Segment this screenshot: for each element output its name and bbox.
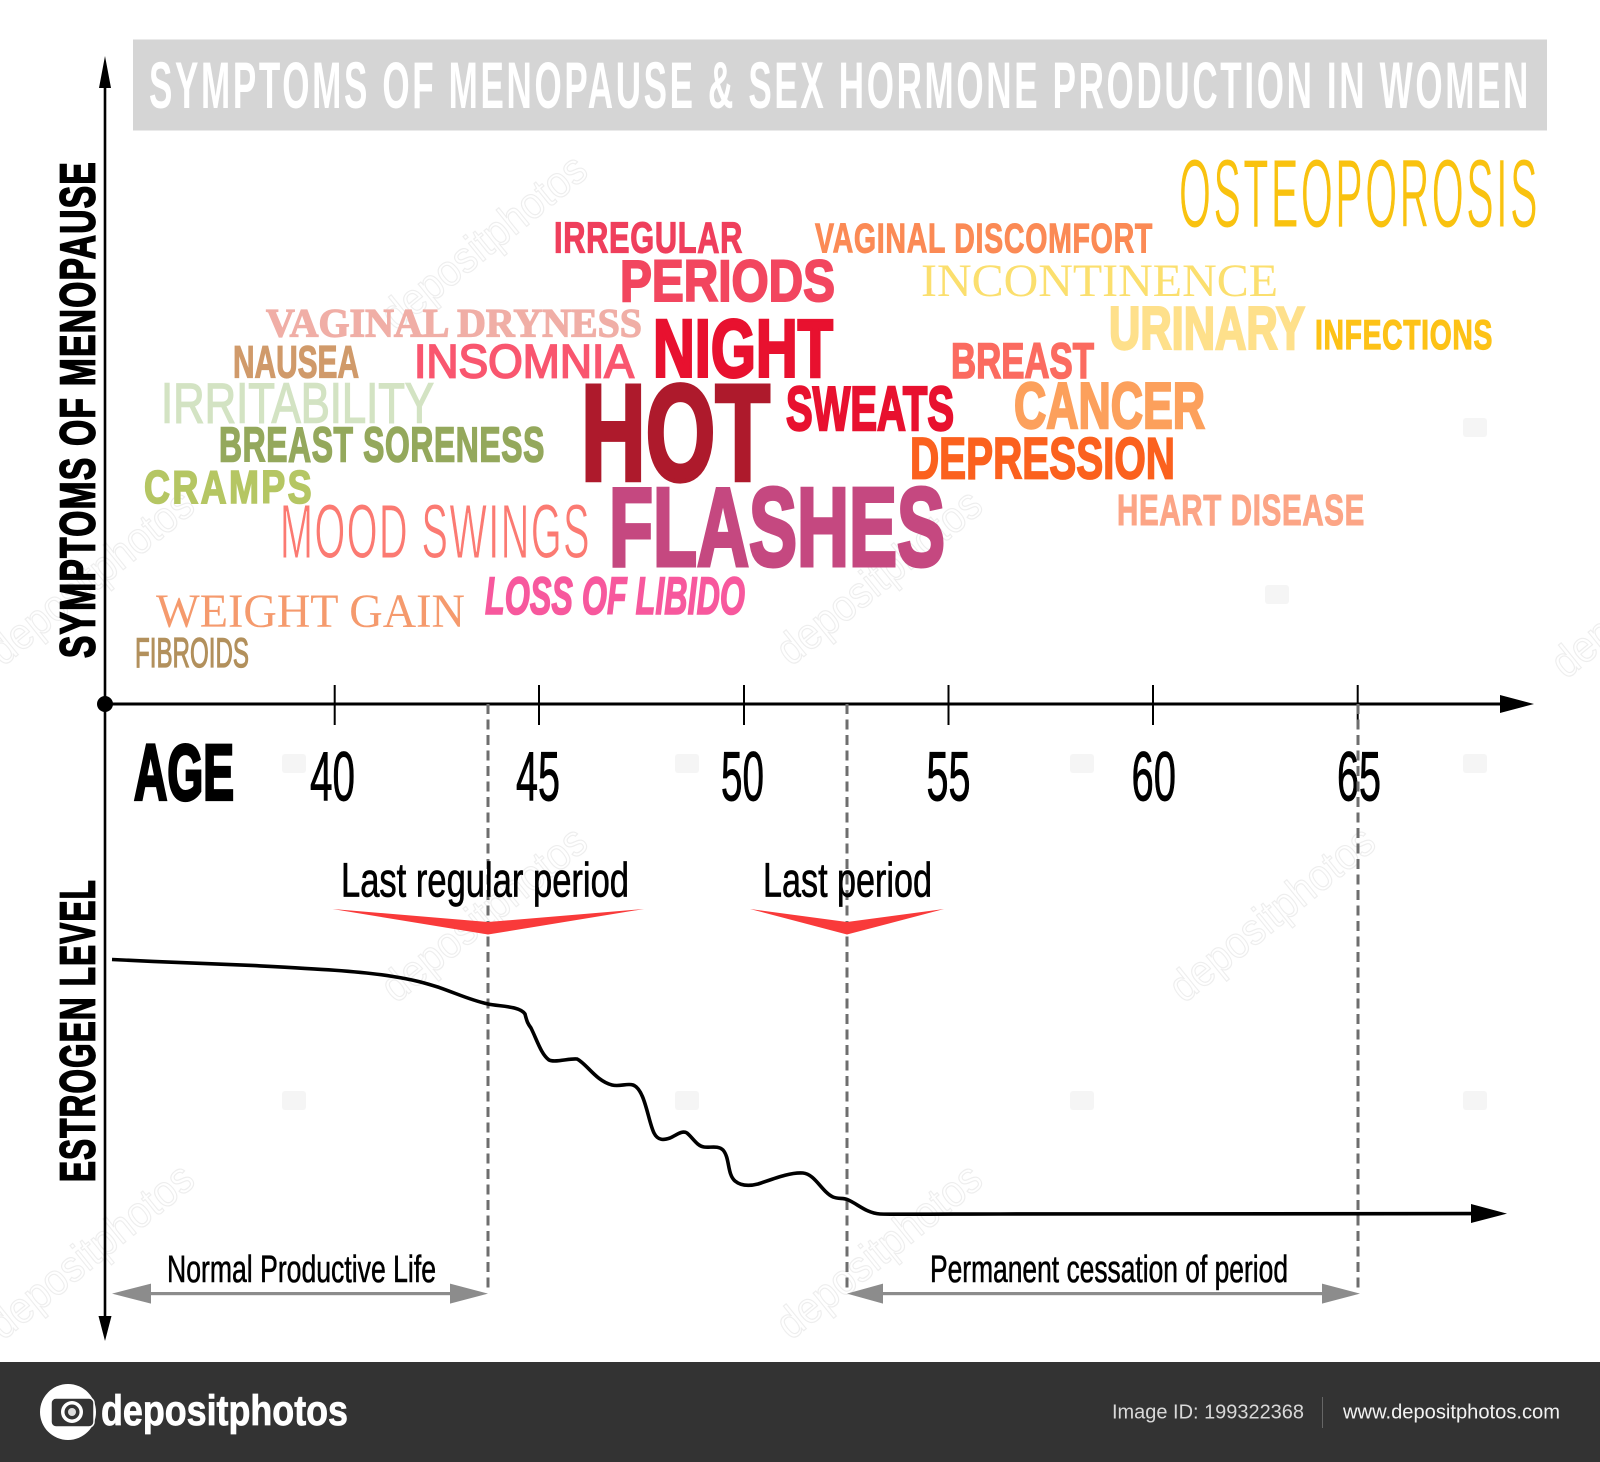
word: infections: INFECTIONS (1315, 311, 1493, 358)
watermark pattern: depositphotos (371, 816, 597, 1012)
callout: last period (750, 854, 944, 934)
brand name: depositphotos (101, 1387, 348, 1435)
age tick labels: 45 (516, 738, 560, 816)
watermark pattern: depositphotos (766, 479, 992, 675)
y axis with arrowheads (98, 56, 112, 1341)
footer bar (0, 1362, 1600, 1462)
y axis label: estrogen: ESTROGEN LEVEL (52, 879, 106, 1182)
word cloud of symptoms (135, 139, 1540, 676)
word: incontinence: INCONTINENCE (921, 255, 1278, 307)
age tick labels (310, 738, 1381, 816)
watermark pattern: depositphotos (766, 1153, 992, 1349)
watermark pattern: depositphotos (371, 144, 597, 340)
image id: Image ID: 199322368 (1112, 1400, 1304, 1424)
word: cancer: CANCER (1014, 369, 1205, 442)
word: vaginal dryness: VAGINAL DRYNESS (266, 300, 642, 346)
age axis with ticks (97, 685, 1534, 725)
word: breast soreness: BREAST SORENESS (219, 418, 545, 472)
age tick labels: 50 (721, 738, 764, 816)
word: sweats: SWEATS (786, 374, 954, 444)
label: permanent cessation of period: Permanent cessation of period (930, 1249, 1288, 1291)
callout: last period: Last period (763, 854, 932, 908)
word: vaginal discomfort: VAGINAL DISCOMFORT (815, 214, 1153, 262)
word: nausea: NAUSEA (233, 336, 359, 388)
dashed age markers (488, 704, 1358, 1291)
word: urinary: URINARY (1109, 295, 1305, 362)
age heading: AGE (134, 728, 234, 816)
range arrow: permanent cessation (847, 1284, 1360, 1304)
age tick labels: 40 (310, 738, 355, 816)
word: irritability: IRRITABILITY (161, 372, 434, 436)
word: irregular: IRREGULAR (554, 214, 743, 262)
word: night: NIGHT (653, 304, 833, 394)
word: fibroids: FIBROIDS (135, 629, 249, 676)
age tick labels: 55 (926, 738, 970, 816)
word: hot: HOT (581, 357, 770, 510)
range arrow: normal productive life (112, 1284, 488, 1304)
word: flashes: FLASHES (609, 466, 945, 590)
word: mood swings: MOOD SWINGS (280, 489, 591, 575)
callout: last regular period (332, 854, 644, 934)
watermark pattern: depositphotos (1159, 816, 1385, 1012)
estrogen level curve (112, 960, 1507, 1223)
word: heart disease: HEART DISEASE (1117, 487, 1365, 535)
word: loss of libido: LOSS OF LIBIDO (485, 567, 745, 626)
label: normal productive life: Normal Productive Life (167, 1249, 436, 1291)
website address: www.depositphotos.com (1342, 1400, 1560, 1424)
word: periods: PERIODS (620, 249, 835, 314)
word: weight gain: WEIGHT GAIN (156, 585, 465, 638)
age tick labels: 65 (1337, 738, 1381, 816)
word: insomnia: INSOMNIA (414, 334, 635, 388)
icon: camera logo (40, 1384, 96, 1440)
age tick labels: 60 (1132, 738, 1176, 816)
word: breast: BREAST (951, 333, 1094, 389)
word: cramps: CRAMPS (144, 461, 314, 513)
callout: last regular period: Last regular period (341, 854, 629, 908)
word: depression: DEPRESSION (910, 426, 1175, 492)
